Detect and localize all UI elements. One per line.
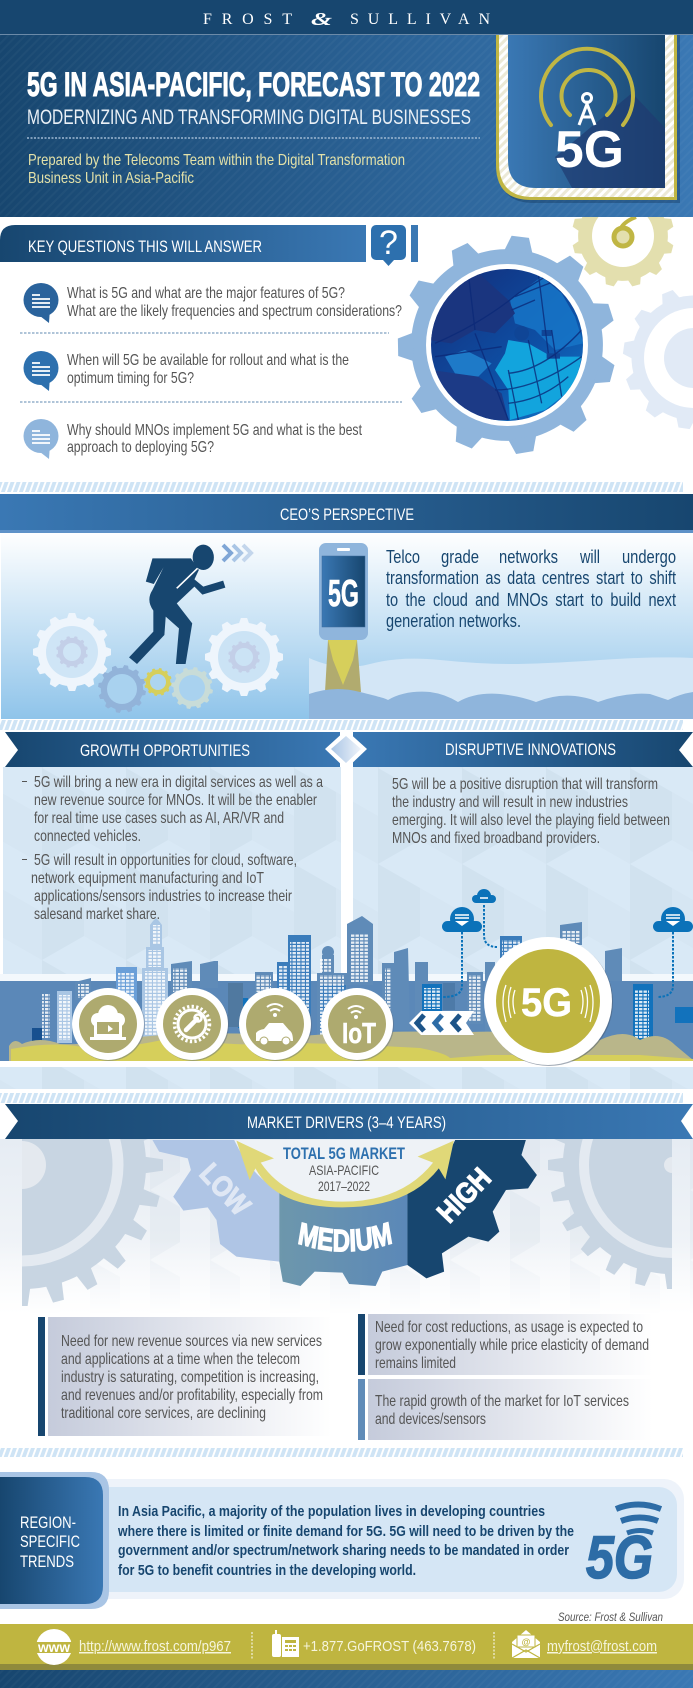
icon: 5G phone	[319, 543, 368, 640]
icon: chevrons	[223, 545, 251, 561]
heading: key questions	[0, 225, 366, 262]
heading ribbon: growth opportunities	[5, 732, 340, 767]
clouds	[309, 657, 693, 719]
header bar: Frost & Sullivan: FROST	[203, 11, 292, 28]
link: email: myfrost@frost.com	[547, 1638, 657, 1655]
text: disruption: MNOs and fixed broadband providers.	[392, 830, 600, 847]
question 1: What are the likely frequencies and spectrum considerations?	[67, 303, 402, 320]
driver box: cost reductions	[358, 1314, 653, 1375]
label: low: LOW	[193, 1157, 257, 1222]
question 3: approach to deploying 5G?	[67, 439, 214, 456]
text: CEO's quote: will	[579, 547, 600, 567]
text: CEO's quote: grade	[441, 547, 479, 567]
icon: 5G signal: 5G	[586, 1524, 653, 1591]
rocket flame	[325, 640, 361, 692]
buildings	[32, 916, 693, 1045]
heading ribbon: growth opportunities: GROWTH OPPORTUNITIES	[80, 741, 250, 760]
text: disruption: the industry and will result in new industries	[392, 794, 628, 811]
icon: 5G phone badge: 5G	[555, 121, 624, 179]
prepared-by text: Business Unit in Asia-Pacific	[28, 170, 194, 187]
hills	[9, 1032, 693, 1061]
text: growth bullets: connected vehicles.	[34, 828, 141, 845]
driver box: new revenue: industry is saturating, competition is increasing,	[61, 1369, 319, 1386]
gear with globe	[398, 236, 614, 454]
icon: www	[33, 1629, 75, 1665]
question 1	[24, 283, 402, 323]
header bar: Frost & Sullivan	[0, 0, 693, 35]
heading: key questions: KEY QUESTIONS THIS WILL ANSWER	[28, 237, 262, 256]
driver box: new revenue: and applications at a time when the telecom	[61, 1351, 300, 1368]
question 3: Why should MNOs implement 5G and what is the best	[67, 422, 362, 439]
icon: question mark: ?	[379, 224, 398, 262]
subtitle: MODERNIZING AND TRANSFORMING DIGITAL BUSINESSES	[27, 106, 471, 129]
panel: growth opportunities	[3, 732, 341, 974]
driver box: new revenue: traditional core services, are declining	[61, 1405, 266, 1422]
header bar: Frost & Sullivan: SULLIVAN	[350, 11, 490, 28]
text: total 5G market: 2017–2022	[318, 1178, 370, 1194]
text: growth bullets: 5G will result in opportunities for cloud, software,	[34, 852, 297, 869]
text: growth bullets: salesand market share.	[34, 906, 160, 923]
heading: region-specific trends: REGION-	[20, 1513, 76, 1532]
text: regional trends: government and/or spectrum/network sharing needs to be mandated in order	[118, 1542, 569, 1559]
label: medium: MEDIUM	[298, 1222, 392, 1252]
icon: cloud laptop	[72, 988, 145, 1061]
text: growth bullets	[22, 774, 323, 923]
heading: region-specific trends	[0, 1477, 103, 1604]
text: regional trends: In Asia Pacific, a majority of the population lives in developing countries	[118, 1503, 545, 1520]
text: total 5G market: TOTAL 5G MARKET	[283, 1144, 405, 1163]
icon: www: www	[37, 1639, 70, 1655]
badge: 5G	[484, 937, 613, 1066]
badge: 5G: 5G	[521, 981, 572, 1025]
text: CEO's quote	[386, 547, 676, 631]
panel: key questions	[0, 217, 693, 459]
gold gear	[572, 217, 674, 286]
panel: market drivers	[0, 1104, 693, 1440]
panel: CEO's perspective	[0, 494, 693, 719]
label: medium	[298, 1222, 392, 1252]
text: regional trends	[117, 1503, 574, 1579]
text: growth bullets: 5G will bring a new era in digital services as well as a	[34, 774, 323, 791]
icon: email: @	[522, 1637, 531, 1647]
icon: email	[512, 1630, 540, 1658]
driver box: IoT growth	[358, 1379, 653, 1440]
chevron arrow	[409, 1011, 474, 1035]
background gear left	[22, 1139, 163, 1306]
heading ribbon: market drivers: MARKET DRIVERS (3–4 YEARS)	[247, 1113, 446, 1132]
text: regional trends: for 5G to benefit countries in the developing world.	[118, 1562, 416, 1579]
icon: speech bubble 1	[24, 283, 58, 323]
icon: gear and wrench	[156, 988, 229, 1061]
illustration: running man	[129, 545, 225, 664]
header bar: Frost & Sullivan: &	[311, 9, 332, 29]
question 3	[24, 419, 362, 459]
text: growth bullets: applications/sensors industries to increase their	[34, 888, 293, 905]
icon: telephone	[272, 1630, 299, 1657]
gear segments	[152, 1140, 537, 1286]
text: telephone: +1.877.GoFROST (463.7678)	[303, 1638, 476, 1655]
question 2: When will 5G be available for rollout and what is the	[67, 352, 349, 369]
text: regional trends: where there is limited or finite demand for 5G. 5G will need to be driven by the	[117, 1523, 574, 1540]
text: CEO's quote: undergo	[622, 547, 676, 567]
question 2: optimum timing for 5G?	[67, 370, 194, 387]
heading ribbon: disruptive innovations	[353, 732, 693, 767]
icon: IoT	[321, 988, 394, 1061]
icon: question mark	[371, 224, 418, 266]
prepared-by text: Prepared by the Telecoms Team within the Digital Transformation	[28, 152, 405, 169]
driver box: new revenue: Need for new revenue sources via new services	[61, 1333, 322, 1350]
background gear right	[548, 1139, 672, 1289]
text: growth bullets: network equipment manufacturing and IoT	[31, 870, 264, 887]
label: high: HIGH	[431, 1162, 497, 1229]
text: growth bullets: new revenue source for MNOs. It will be the enabler	[34, 792, 318, 809]
text: growth bullets: for real time use cases such as AI, AR/VR and	[34, 810, 284, 827]
driver box: new revenue	[38, 1317, 332, 1436]
driver box: new revenue: and revenues and/or profitability, especially from	[61, 1387, 323, 1404]
heading ribbon: market drivers	[5, 1104, 693, 1139]
heading ribbon: disruptive innovations: DISRUPTIVE INNOVATIONS	[445, 740, 616, 759]
icon: IoT: IoT	[342, 1018, 376, 1050]
footer	[0, 1624, 693, 1688]
text: CEO's quote: generation networks.	[386, 611, 521, 631]
panel: region-specific trends	[0, 1472, 684, 1609]
panel: disruptive innovations	[353, 732, 693, 974]
icon: 5G phone: 5G	[328, 573, 359, 615]
text: total 5G market	[283, 1144, 405, 1194]
text: CEO's quote: networks	[499, 547, 558, 567]
driver box: IoT growth: and devices/sensors	[375, 1411, 486, 1428]
icon: speech bubble 3	[24, 419, 58, 459]
text: total 5G market: ASIA-PACIFIC	[309, 1162, 379, 1178]
driver box: cost reductions: remains limited	[375, 1355, 456, 1372]
link: website: http://www.frost.com/p967	[79, 1638, 231, 1655]
cloud network	[442, 889, 693, 997]
text: disruption	[392, 776, 670, 847]
illustration: gears	[33, 613, 283, 717]
city illustration	[0, 889, 693, 1089]
question 2	[24, 351, 349, 391]
title: 5G IN ASIA-PACIFIC, FORECAST TO 2022	[27, 66, 480, 104]
prepared-by text	[28, 152, 405, 187]
icon: centre diamond	[325, 730, 367, 769]
question 1: What is 5G and what are the major features of 5G?	[67, 285, 345, 302]
icon: connected car	[239, 988, 312, 1061]
icon: 5G phone badge	[496, 35, 680, 203]
heading: CEO's perspective: CEO’S PERSPECTIVE	[280, 505, 414, 524]
banner	[0, 35, 693, 217]
light gear	[614, 278, 693, 438]
heading: region-specific trends: SPECIFIC	[20, 1532, 80, 1551]
source note: Source: Frost & Sullivan	[558, 1610, 663, 1624]
text: CEO's quote: Telco	[386, 547, 420, 567]
heading: CEO's perspective	[0, 494, 693, 533]
icon: speech bubble 2	[24, 351, 58, 391]
heading: region-specific trends: TRENDS	[20, 1552, 74, 1571]
